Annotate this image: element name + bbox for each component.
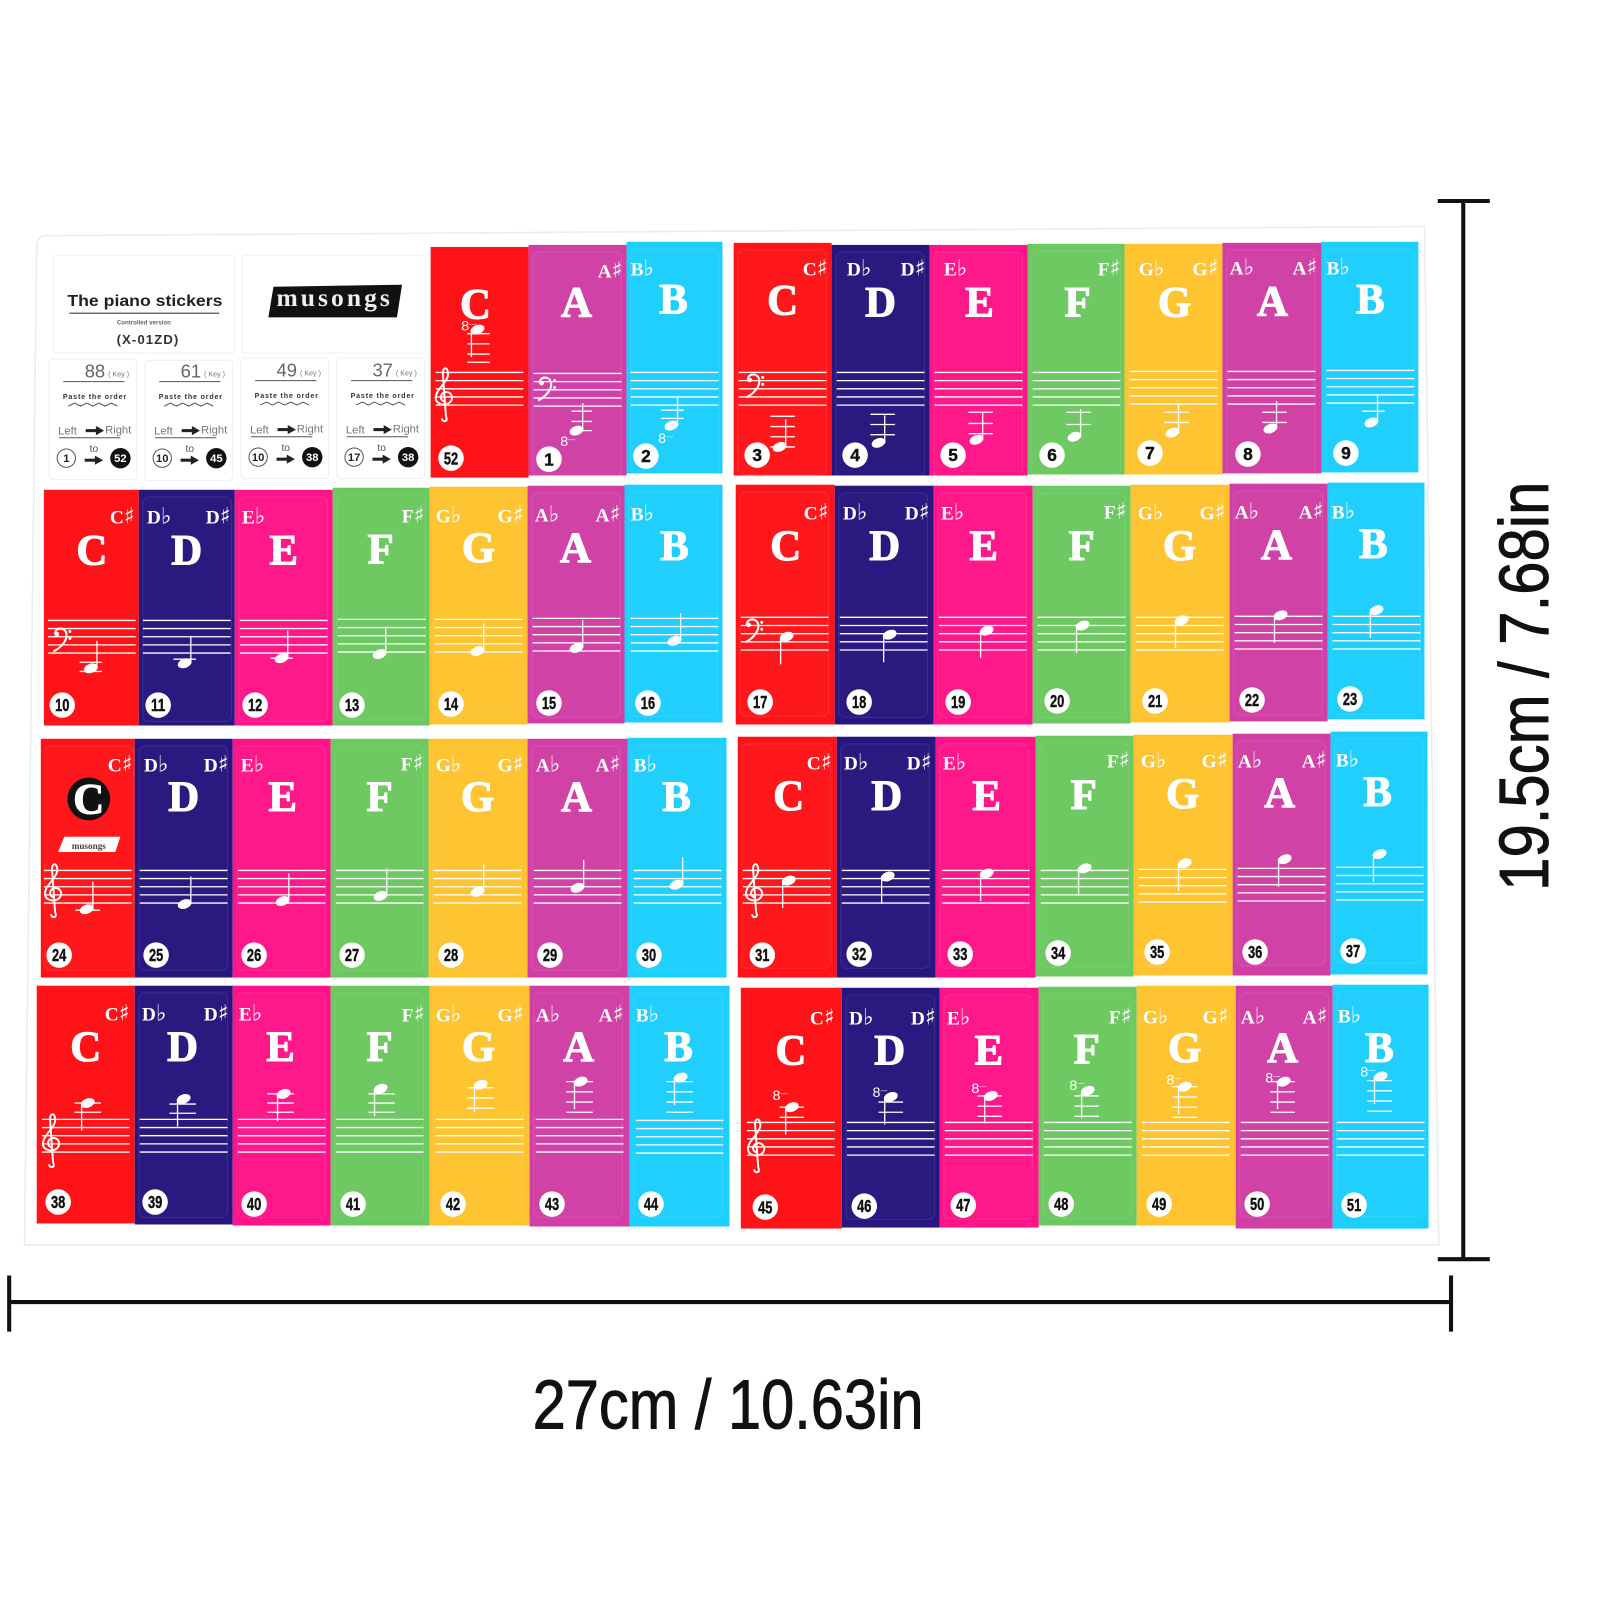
key 25: D: 25 [149, 945, 164, 965]
model number: (X-01ZD) [117, 332, 179, 347]
card: 49 keys: 38 [306, 452, 318, 464]
card: 88 keys: 1 [63, 453, 69, 465]
key 50: A [1236, 986, 1333, 1229]
key 48: F [1039, 987, 1137, 1226]
key 51: B: B [1365, 1025, 1394, 1072]
card: 61 keys: 10 [156, 453, 168, 465]
key 33: E [936, 737, 1036, 978]
key 13: F [333, 488, 430, 726]
key 26: E: E♭ [241, 751, 264, 777]
key 11: D: D♯ [206, 503, 231, 529]
card: 49 keys: Paste the order [255, 392, 319, 400]
key 13: F: F♯ [402, 502, 424, 528]
card: 49 keys: ( Key ) [300, 370, 321, 378]
key 46: D: D♭ [849, 1004, 874, 1030]
key 20: F: 20 [1050, 691, 1064, 711]
height label: 19.5cm / 7.68in [1485, 482, 1563, 891]
key 40: E: E [266, 1024, 295, 1071]
key 47: E: 8 [971, 1081, 979, 1097]
key 35: G: 35 [1150, 942, 1165, 962]
key 36: A: A♭ [1238, 747, 1262, 773]
card: 49 keys: Left [250, 425, 270, 437]
key 12: E: 12 [248, 695, 262, 715]
key 20: F: F [1069, 523, 1095, 570]
key 49: G: --- [1174, 1075, 1182, 1083]
key 28: G: G♯ [498, 751, 523, 777]
card: 61 keys: 45 [210, 453, 223, 465]
key 18: D [835, 486, 934, 724]
key 31: C: C♯ [807, 749, 832, 775]
key 29: A: A♭ [536, 751, 560, 777]
key 34: F [1036, 736, 1134, 977]
key 23: B: 23 [1343, 689, 1357, 709]
card: 37 keys: ( Key ) [396, 370, 417, 378]
key 46: D: D [874, 1027, 905, 1074]
key 35: G: G♭ [1141, 747, 1166, 773]
key 43: A: A♭ [536, 1001, 560, 1027]
key 2: B: 8 [658, 431, 666, 447]
key 28: G: 28 [444, 945, 458, 965]
card: 88 keys: 88 [85, 361, 105, 382]
key 44: B [630, 986, 730, 1227]
key 52: C: 8 [461, 319, 469, 335]
key 46: D: 46 [857, 1196, 872, 1216]
key 10: C: C♯ [110, 503, 135, 529]
key 29: A: A [561, 774, 592, 821]
key 18: D: D [869, 523, 900, 570]
key 11: D: 11 [151, 695, 166, 715]
key 44: B: B♭ [636, 1001, 659, 1027]
key 23: B [1328, 483, 1424, 719]
key 10: C [44, 490, 139, 726]
key 35: G [1134, 735, 1233, 976]
card: 88 keys: Left [58, 426, 78, 438]
key 9: B: B [1356, 276, 1385, 323]
key 19: E: E♭ [941, 499, 964, 525]
key 17: C: 17 [753, 692, 767, 712]
key 6: F [1028, 244, 1124, 476]
key 38: C: 38 [51, 1192, 66, 1212]
key 49: G: 49 [1152, 1194, 1166, 1214]
card: 61 keys: Left [154, 426, 174, 438]
card: 61 keys: to [186, 444, 194, 455]
key 43: A: A♯ [599, 1001, 623, 1027]
key 50: A: A [1267, 1025, 1298, 1072]
key 25: D: D [168, 774, 199, 821]
key 19: E: 19 [951, 692, 965, 712]
key 38: C: C [70, 1024, 101, 1071]
key 51: B [1333, 985, 1429, 1229]
key 41: F: F♯ [402, 1001, 424, 1027]
key 19: E [934, 486, 1033, 724]
key 18: D: D♯ [905, 499, 930, 525]
key 52: C: C [460, 281, 491, 328]
key 48: F: --- [1077, 1080, 1085, 1088]
key 50: A: A♭ [1241, 1003, 1265, 1029]
key 22: A: A♯ [1299, 498, 1323, 524]
key 46: D: D♯ [911, 1004, 936, 1030]
key 12: E: E♭ [242, 503, 265, 529]
key 1: A: --- [568, 436, 576, 444]
key 8: A: A♯ [1292, 254, 1317, 280]
key 26: E [233, 739, 331, 978]
card: 49 keys: 49 [277, 360, 297, 381]
card: 61 keys [145, 360, 233, 481]
key 45: C: C [775, 1027, 806, 1074]
key 21: G: G [1163, 523, 1196, 570]
key 28: G: G [461, 774, 494, 821]
key 15: A: A [560, 525, 591, 572]
key 24: C with logo [41, 739, 135, 978]
key 6: F: F [1064, 279, 1091, 326]
key 47: E: E [974, 1027, 1003, 1074]
key 21: G: G♯ [1200, 499, 1226, 525]
key 31: C: 31 [755, 945, 770, 965]
key 39: D: 39 [148, 1192, 162, 1212]
backing sheet [24, 227, 1439, 1245]
key 45: C: 45 [758, 1197, 773, 1217]
key 7: G: G♭ [1139, 256, 1164, 282]
card: 61 keys: ( Key ) [204, 371, 225, 379]
key 52: C: --- [469, 321, 477, 329]
key 32: D [837, 737, 936, 978]
key 16: B: B♭ [631, 500, 654, 526]
key 16: B: 16 [641, 693, 655, 713]
key 11: D [139, 490, 235, 726]
key 14: G: 14 [444, 694, 458, 714]
key 48: F: 8 [1069, 1078, 1077, 1094]
key 42: G: G [462, 1024, 495, 1071]
key 51: B: 51 [1347, 1195, 1361, 1215]
key 1: A [529, 245, 627, 477]
key 3: C: 3 [752, 445, 762, 465]
key 50: A: 50 [1250, 1194, 1264, 1214]
key 17: C: C♯ [804, 499, 829, 525]
key 5: E: 5 [948, 445, 958, 465]
key 30: B: B [662, 774, 691, 821]
key 42: G: 42 [446, 1194, 460, 1214]
key 8: A [1222, 243, 1321, 474]
key 47: E: 47 [956, 1195, 970, 1215]
key 21: G [1131, 485, 1230, 722]
key 30: B [628, 738, 727, 978]
key 10: C: C [76, 527, 107, 574]
key 3: C [734, 243, 832, 476]
key 15: A: A♯ [596, 501, 620, 527]
key 51: B: --- [1368, 1066, 1376, 1074]
key 30: B: B♭ [634, 751, 657, 777]
key 39: D: D♯ [204, 1000, 229, 1026]
key 48: F: F♯ [1109, 1003, 1132, 1029]
key 11: D: D [171, 527, 202, 574]
key 5: E [930, 245, 1028, 477]
key 41: F [331, 986, 430, 1226]
key 45: C: 8 [772, 1088, 780, 1104]
key 14: G [430, 487, 528, 724]
key 25: D: D♭ [144, 751, 168, 777]
key 20: F: F♯ [1104, 498, 1127, 524]
key 28: G: G♭ [436, 751, 461, 777]
key 14: G: G♭ [436, 502, 461, 528]
key 33: E: E♭ [943, 749, 966, 775]
key 40: E: 40 [247, 1194, 261, 1214]
key 22: A: A♭ [1235, 498, 1259, 524]
key 34: F: F♯ [1107, 747, 1130, 773]
key 37: B: 37 [1346, 941, 1360, 961]
key 42: G: G♭ [436, 1001, 461, 1027]
title panel [53, 255, 235, 353]
card: 88 keys: 52 [114, 453, 127, 465]
key 4: D: D [865, 279, 896, 326]
key 50: A: 8 [1265, 1071, 1273, 1087]
key 24: C with logo: C [73, 776, 104, 823]
key 9: B [1321, 242, 1418, 473]
key 47: E: --- [979, 1083, 987, 1091]
key 23: B: B [1359, 521, 1388, 568]
key 1: A: 1 [544, 449, 554, 469]
key 15: A: A♭ [535, 501, 559, 527]
card: 88 keys: to [90, 444, 98, 455]
key 51: B: 8 [1360, 1065, 1368, 1081]
key 27: F: 27 [345, 945, 359, 965]
key 52: C: 52 [444, 448, 458, 468]
key 32: D: 32 [852, 944, 866, 964]
key 3: C: C♯ [803, 256, 828, 282]
key 6: F: 6 [1047, 445, 1057, 465]
key 2: B: B♭ [631, 256, 654, 282]
key 40: E: E♭ [239, 1000, 262, 1026]
key 29: A [528, 739, 628, 978]
key 15: A: 15 [542, 693, 556, 713]
card: 37 keys: 17 [348, 452, 360, 464]
key 22: A: 22 [1245, 690, 1259, 710]
card: 49 keys: to [281, 443, 290, 454]
key 48: F: F [1074, 1026, 1100, 1073]
key 10: C: 10 [55, 695, 69, 715]
key 38: C [37, 986, 135, 1223]
key 8: A: A♭ [1230, 254, 1254, 280]
key 9: B: 9 [1341, 443, 1351, 463]
key 29: A: A♯ [596, 751, 620, 777]
card: 88 keys: ( Key ) [108, 371, 129, 379]
card: 88 keys [49, 359, 137, 480]
key 1: A: 8 [560, 434, 568, 450]
key 2: B: 2 [641, 446, 651, 466]
key 37: B: B [1363, 769, 1392, 816]
key 22: A: A [1261, 522, 1292, 569]
key 29: A: 29 [543, 945, 557, 965]
card: 37 keys: Left [346, 425, 366, 437]
key 12: E [235, 490, 333, 726]
key 30: B: 30 [642, 945, 656, 965]
key 19: E: E [969, 523, 998, 570]
key 50: A: A♯ [1303, 1003, 1328, 1029]
key 43: A: 43 [545, 1194, 559, 1214]
key 16: B [624, 485, 722, 722]
key 34: F: 34 [1051, 943, 1066, 963]
key 33: E: E [972, 773, 1001, 820]
key 7: G [1124, 244, 1222, 476]
key 4: D: D♭ [847, 256, 872, 282]
card: 37 keys: 37 [372, 360, 393, 381]
key 45: C: --- [780, 1090, 788, 1098]
key 41: F: F [367, 1024, 393, 1071]
card: 49 keys [241, 358, 329, 479]
key 49: G: G [1168, 1025, 1201, 1072]
key 34: F: F [1071, 772, 1097, 819]
key 11: D: D♭ [147, 503, 172, 529]
key 32: D: D♭ [844, 749, 868, 775]
key 18: D: D♭ [843, 499, 867, 525]
key 39: D: D [167, 1024, 198, 1071]
key 39: D [135, 986, 233, 1224]
brand panel: musongs [242, 255, 426, 353]
card: 61 keys: 61 [181, 361, 201, 382]
key 17: C: C [770, 523, 801, 570]
key 36: A: A♯ [1302, 747, 1327, 773]
key 24: C with logo: musongs [72, 841, 106, 851]
key 35: G: G [1166, 771, 1199, 818]
key 45: C [741, 988, 842, 1229]
key 13: F: F [368, 526, 394, 573]
key 13: F: 13 [345, 695, 359, 715]
key 17: C [736, 485, 835, 724]
key 52: C [431, 247, 529, 478]
key 48: F: 48 [1054, 1194, 1069, 1214]
card: 37 keys [337, 358, 424, 479]
key 44: B: 44 [644, 1194, 658, 1214]
key 41: F: 41 [346, 1194, 360, 1214]
key 14: G: G [462, 525, 495, 572]
key 4: D [832, 245, 930, 477]
key 8: A: 8 [1243, 444, 1253, 464]
card: 37 keys: Right [393, 424, 420, 436]
key 46: D: 8 [872, 1085, 880, 1101]
key 50: A: --- [1273, 1073, 1281, 1081]
key 8: A: A [1257, 278, 1288, 325]
key 2: B [627, 242, 722, 473]
key 40: E [233, 986, 331, 1226]
key 31: C [738, 737, 837, 978]
card: 37 keys: to [377, 443, 386, 454]
key 26: E: 26 [247, 945, 261, 965]
card: 61 keys: Right [201, 425, 228, 437]
key 22: A [1230, 484, 1328, 721]
width dimension arrow [9, 1276, 1451, 1332]
title: The piano stickers: The piano stickers [67, 293, 223, 310]
key 5: E: E♭ [944, 256, 967, 282]
card: 49 keys: 10 [252, 452, 264, 464]
key 32: D: D♯ [907, 749, 932, 775]
key 49: G: G♭ [1143, 1003, 1169, 1029]
key 2: B: B [659, 276, 688, 323]
key 42: G [430, 986, 530, 1226]
key 21: G: G♭ [1138, 499, 1163, 525]
key 44: B: B [664, 1024, 693, 1071]
key 7: G: G♯ [1192, 256, 1218, 282]
key 6: F: F♯ [1098, 256, 1120, 282]
card: 37 keys: 38 [402, 452, 414, 464]
key 46: D: --- [880, 1087, 888, 1095]
key 20: F [1033, 486, 1131, 723]
card: 88 keys: Right [105, 425, 132, 437]
key 15: A [528, 486, 624, 723]
key 27: F: F♯ [401, 750, 423, 776]
key 24: C with logo: C♯ [108, 751, 133, 777]
key 5: E: E [965, 279, 994, 326]
key 36: A: A [1264, 770, 1295, 817]
key 46: D [842, 988, 940, 1228]
key 36: A [1233, 734, 1331, 976]
height dimension arrow [1438, 201, 1490, 1259]
key 26: E: E [268, 774, 297, 821]
key 32: D: D [871, 773, 902, 820]
key 23: B: B♭ [1332, 498, 1355, 524]
brand panel: musongs: musongs [276, 283, 393, 312]
key 27: F: F [367, 774, 393, 821]
key 43: A: A [563, 1024, 594, 1071]
subtitle: controlled version: Controlled version [117, 319, 171, 326]
key 42: G: G♯ [498, 1001, 523, 1027]
card: 49 keys: Right [297, 424, 324, 436]
key 18: D: 18 [852, 692, 867, 712]
key 51: B: B♭ [1338, 1002, 1361, 1028]
key 36: A: 36 [1248, 942, 1263, 962]
card: 61 keys: Paste the order [159, 393, 223, 401]
key 7: G: 7 [1145, 443, 1155, 463]
key 49: G: 8 [1166, 1073, 1174, 1089]
key 35: G: G♯ [1202, 747, 1228, 773]
key 39: D: D♭ [142, 1000, 166, 1026]
key 12: E: E [269, 527, 298, 574]
key 33: E: 33 [953, 944, 968, 964]
key 16: B: B [660, 523, 689, 570]
key 24: C with logo: 24 [52, 945, 67, 965]
key 21: G: 21 [1148, 691, 1163, 711]
key 43: A [530, 986, 630, 1227]
key 45: C: C♯ [810, 1004, 835, 1030]
key 25: D: D♯ [204, 751, 229, 777]
width label: 27cm / 10.63in [533, 1366, 923, 1444]
key 1: A: A [561, 279, 592, 326]
key 14: G: G♯ [498, 502, 523, 528]
key 37: B [1331, 732, 1428, 974]
key 27: F [331, 739, 429, 978]
key 49: G [1137, 986, 1236, 1226]
key 2: B: --- [666, 433, 674, 441]
key 47: E [940, 988, 1039, 1228]
key 37: B: B♭ [1336, 746, 1359, 772]
key 25: D [135, 739, 233, 978]
key 47: E: E♭ [947, 1004, 970, 1030]
key 49: G: G♯ [1203, 1003, 1229, 1029]
key 1: A: A♯ [598, 258, 622, 284]
card: 88 keys: Paste the order [63, 393, 127, 401]
key 38: C: C♯ [105, 1000, 130, 1026]
key 7: G: G [1158, 279, 1191, 326]
card: 37 keys: Paste the order [351, 392, 415, 400]
key 4: D: D♯ [901, 256, 926, 282]
key 9: B: B♭ [1327, 254, 1350, 280]
key 3: C: C [767, 277, 798, 324]
key 4: D: 4 [850, 445, 860, 465]
key 31: C: C [773, 773, 804, 820]
key 28: G [429, 739, 528, 978]
